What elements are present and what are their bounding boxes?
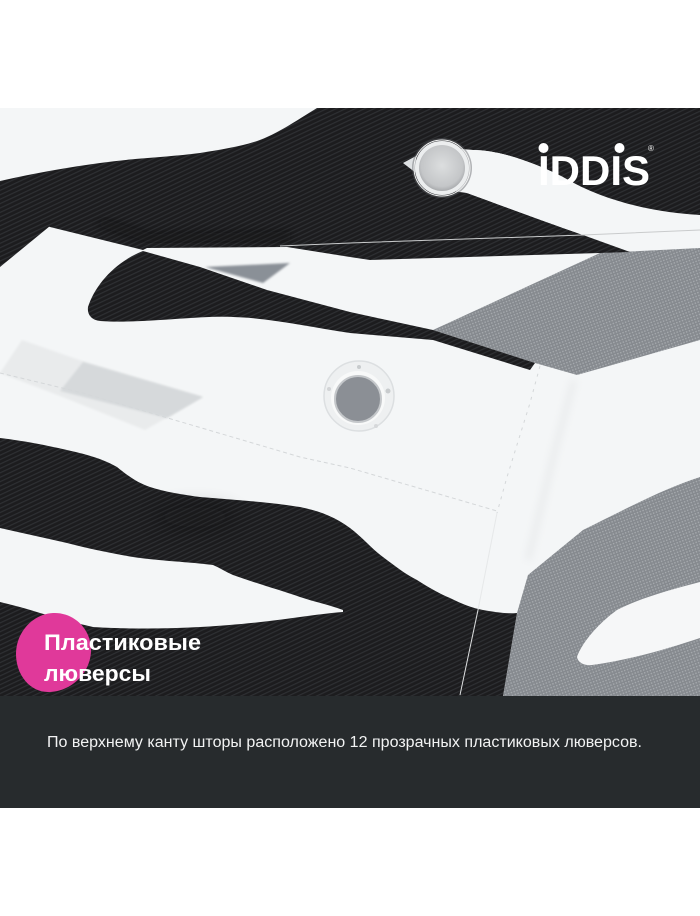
hem stitch, horizontal	[0, 373, 497, 511]
black area of the top fold	[0, 108, 700, 260]
grey stripe, lower right	[503, 477, 700, 696]
white stripe in bottom black	[0, 528, 343, 628]
hem edge shadow	[528, 380, 574, 560]
fold shading on bottom black stripe	[192, 496, 222, 498]
heading: Пластиковые	[44, 630, 201, 655]
grey stripe, upper right	[433, 248, 700, 375]
pink accent circle	[16, 613, 91, 692]
heading: люверсы	[44, 661, 151, 686]
fold stitch	[280, 230, 700, 246]
photo: zebra curtain	[0, 108, 700, 696]
ghost of print through hem, light	[2, 342, 163, 428]
fold shadow	[100, 222, 290, 238]
heading	[44, 630, 201, 686]
black stripe on middle layer	[88, 251, 535, 370]
description band	[0, 696, 700, 808]
dark left corner	[0, 208, 50, 267]
white stripe behind back grommet	[456, 149, 582, 234]
front grommet	[324, 361, 394, 431]
back grommet	[403, 138, 472, 198]
white stripe inside grey	[577, 582, 700, 665]
bottom black stripe	[0, 438, 517, 696]
hem stitch over black	[478, 513, 497, 610]
infographic page	[0, 108, 700, 808]
hem stitch, vertical	[497, 366, 540, 513]
logo: IDDIS: IDDIS	[538, 147, 650, 194]
grey wedge showing under fold	[205, 263, 290, 283]
logo: IDDIS: ®	[648, 144, 654, 153]
description text: По верхнему канту шторы расположено 12 прозрачных пластиковых люверсов.	[47, 734, 642, 751]
ghost of print through hem, dark	[60, 362, 203, 418]
